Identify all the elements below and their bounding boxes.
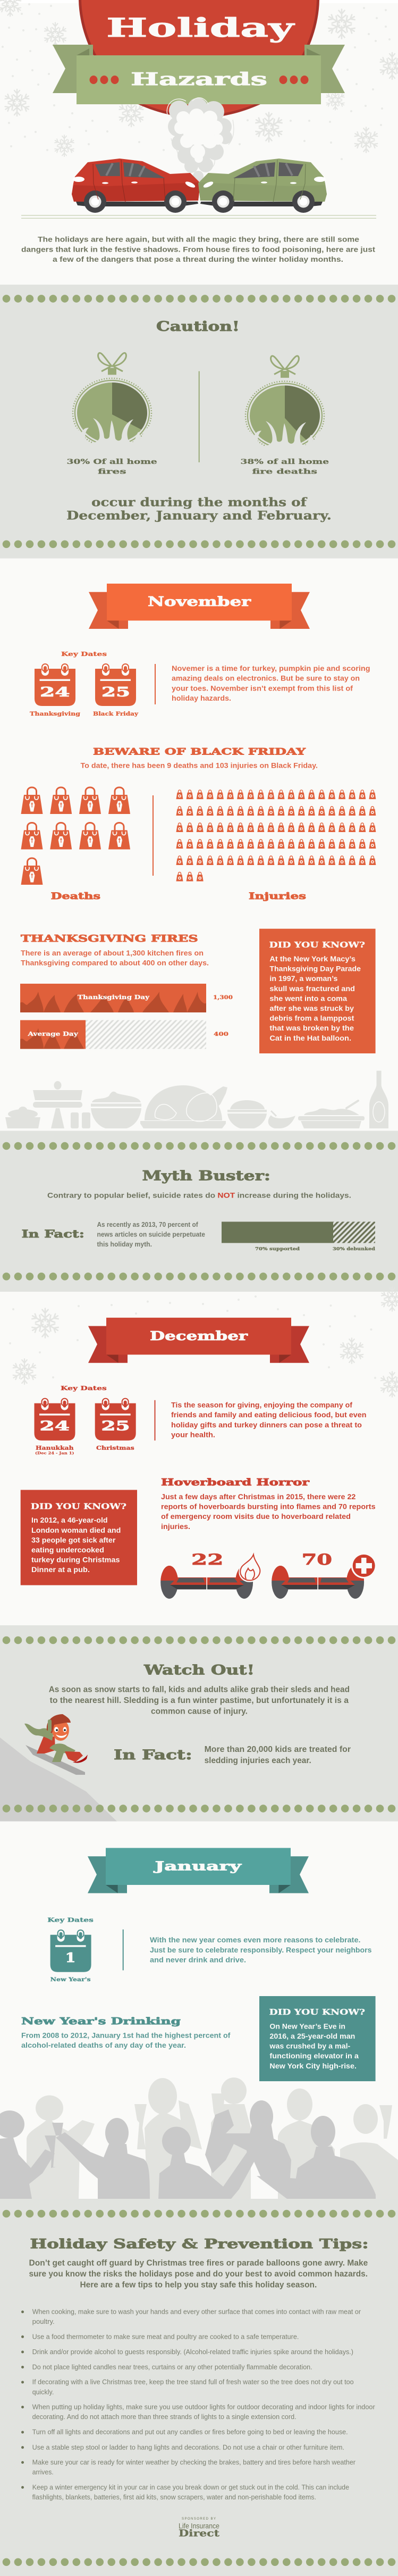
panel: watch out (0, 1625, 398, 1822)
intro text: January (150, 1935, 372, 1964)
sponsor logo: Life Insurance (179, 2522, 219, 2530)
ornament: 38 percent (242, 356, 327, 453)
callout: did you know January: DID YOU KNOW? (269, 2008, 365, 2017)
text: in fact: news articles on suicide perpetuate (97, 1231, 205, 1238)
text: hoverboards: Just a few days after Christmas in 2015, there were 22 (161, 1492, 356, 1501)
callout: did you know December: DID YOU KNOW? (31, 1502, 126, 1511)
callout: did you know November: she went into a coma (269, 994, 347, 1002)
callout: did you know December: 33 people got sick after (31, 1535, 116, 1544)
banner: December (88, 1318, 309, 1363)
intro text: January: With the new year comes even more reasons to celebrate. (150, 1935, 360, 1944)
text: in fact (205, 1745, 351, 1765)
text: safety intro (29, 2259, 368, 2290)
sponsor logo (179, 2517, 220, 2539)
caption: occur during the months of (91, 496, 308, 510)
callout: did you know December: London woman died and (31, 1526, 121, 1534)
intro text: The holidays are here again, but with all the magic they bring, there are still some (38, 235, 359, 244)
panel: January (0, 1848, 398, 2199)
callout: did you know November: Cat in the Hat balloon. (269, 1034, 351, 1042)
intro text: November: your toes. November isn’t exempt from this list of (172, 684, 353, 693)
heading: Myth Buster: Myth Buster: (142, 1168, 270, 1183)
road (21, 215, 376, 219)
intro text: November: holiday hazards. (172, 694, 231, 702)
heading: New Year's drinking: New Year's Drinking (21, 2016, 181, 2027)
text: in fact (97, 1221, 205, 1248)
illustration: party crowd (0, 2078, 398, 2199)
callout: did you know December: turkey during Christmas (31, 1556, 120, 1564)
key dates: 24 (40, 684, 70, 700)
label: 38 percent: fire deaths (252, 468, 317, 476)
label: In Fact: In Fact: (22, 1227, 84, 1240)
bar chart: kitchen fires: Average Day (27, 1031, 78, 1037)
callout: did you know January: 2016, a 25-year-old man (269, 2032, 355, 2040)
sponsor logo: Direct (179, 2528, 220, 2539)
text: myth: Contrary to popular belief, suicide rates do NOT increase during the holidays. (47, 1191, 351, 1199)
text: drinking: alcohol-related deaths of any day of the year. (21, 2041, 186, 2049)
chart: 103 injuries (176, 790, 376, 881)
text: drinking (21, 2031, 231, 2049)
list: safety tips: Drink and/or provide alcohol to guests responsibly. (Alcohol-related traffic injuries spike around the holidays.) (32, 2348, 353, 2356)
list: safety tips: If decorating with a live Christmas tree, keep the tree stand full of fresh water so the tree does not dry out too (32, 2379, 354, 2386)
label: In Fact: In Fact: (114, 1747, 192, 1763)
bar chart: myth coverage (222, 1221, 375, 1252)
bar chart: myth coverage: 30% debunked (333, 1247, 375, 1252)
callout: did you know January: On New Year’s Eve in (269, 2022, 345, 2030)
callout: did you know January: New York City high-rise. (269, 2062, 357, 2070)
panel: December (10, 1287, 398, 1599)
bar chart: myth coverage: 70% supported (255, 1247, 300, 1252)
label: 30 percent: 30% Of all home (67, 458, 157, 466)
list: safety tips: Use a stable step stool or ladder to hang lights and decorations. Do not use a chair or other furniture item. (32, 2444, 344, 2451)
text: drinking: From 2008 to 2012, January 1st had the highest percent of (21, 2031, 231, 2039)
chart: 70 hoverboard ER visits: 70 (302, 1551, 332, 1568)
green ribbon (53, 45, 345, 104)
label: Deaths: Deaths (51, 891, 100, 901)
text: Thanksgiving fires (21, 949, 209, 967)
list: safety tips: When putting up holiday lights, make sure you use outdoor lights for outdoor decorating and indoor lights for indoor (32, 2404, 375, 2411)
key dates (34, 1385, 136, 1455)
heading: Caution: Caution! (156, 319, 240, 334)
callout: did you know November: that was broken by the (269, 1024, 354, 1032)
bar chart: kitchen fires: 1,300 (213, 995, 233, 1001)
illustration: snowy hill (0, 1738, 117, 1822)
key dates: Black Friday (93, 711, 139, 717)
key dates: 24 (39, 1418, 70, 1434)
shield (79, 0, 319, 118)
caption: December, January and February. (66, 509, 332, 523)
intro text: November: Novemer is a time for turkey, pumpkin pie and scoring (172, 664, 370, 672)
bar chart: kitchen fires: Thanksgiving Day (78, 994, 150, 1001)
text: Thanksgiving fires: Thanksgiving compared to about 400 on other days. (21, 959, 209, 967)
icon: red car (72, 159, 200, 213)
intro text: December: Tis the season for giving, enjoying the company of (171, 1400, 352, 1409)
intro text: December (171, 1400, 367, 1439)
intro text: December: holiday gifts and turkey dinners can pose a threat to (171, 1420, 362, 1429)
heading: Watch Out: Watch Out! (143, 1663, 255, 1678)
list: safety tips: Turn off all lights and decorations and put out any candles or fires before going to bed or leaving the house. (32, 2429, 348, 2436)
intro text: January: Just be sure to celebrate responsibly. Respect your neighbors (150, 1946, 372, 1954)
key dates: Hanukkah (36, 1445, 74, 1451)
intro text: a few of the dangers that pose a threat during the winter holiday months. (53, 255, 343, 263)
text: safety intro: Don’t get caught off guard by Christmas tree fires or parade balloons gone awry. Make (29, 2259, 368, 2267)
text: sledding: to the nearest hill. Sledding is a fun winter pastime, but unfortunately it is a (50, 1696, 349, 1705)
banner: January (88, 1848, 309, 1893)
key dates: 25 (101, 1418, 130, 1434)
header panel (0, 0, 398, 263)
label: 30 percent: fires (98, 468, 126, 476)
chart: 9 deaths (21, 787, 130, 885)
text: in fact: More than 20,000 kids are treated for (205, 1745, 351, 1754)
callout: did you know November: Thanksgiving Day Parade (269, 964, 361, 973)
label: Injuries: Injuries (249, 891, 306, 901)
banner: November: November (148, 594, 251, 609)
chart: 22 hoverboard fires: 22 (191, 1551, 223, 1568)
callout: did you know November: debris from a lamppost (269, 1014, 354, 1023)
bar chart: kitchen fires: 400 (214, 1032, 228, 1037)
heading: safety tips: Holiday Safety & Prevention Tips: (30, 2236, 369, 2251)
key dates: Key Dates (47, 1917, 94, 1924)
text: hoverboards: of emergency room visits due to hoverboard related (161, 1512, 351, 1520)
callout: did you know January: was crushed by a mal- (269, 2042, 351, 2050)
text: in fact: As recently as 2013, 70 percent of (97, 1221, 198, 1228)
bar chart: kitchen fires (20, 984, 233, 1049)
intro text: dangers that lurk in the festive shadows. From house fires to food poisoning, here are just (21, 245, 375, 253)
key dates: (Dec 24 - Jan 1) (35, 1451, 74, 1455)
ornament: 30 percent (70, 353, 155, 450)
callout: did you know December: In 2012, a 46-year-old (31, 1516, 108, 1524)
illustration: thanksgiving food (5, 1071, 388, 1128)
key dates: Christmas (96, 1445, 134, 1451)
icon: green car (198, 159, 327, 213)
text: hoverboards: reports of hoverboards bursting into flames and 70 reports (161, 1502, 376, 1511)
intro text: December: friends and family and eating delicious food, but even (171, 1410, 367, 1419)
label: 38 percent (240, 458, 329, 476)
chart: 22 hoverboard fires (160, 1551, 262, 1599)
list: safety tips: Make sure your car is ready for winter weather by checking the brakes, battery and tires before harsh weather (32, 2459, 355, 2466)
icon: smoke (167, 98, 234, 181)
title: Holiday: Holiday (106, 12, 295, 43)
key dates: New Year's (50, 1976, 91, 1983)
heading: Thanksgiving fires: THANKSGIVING FIRES (21, 933, 198, 944)
divider (199, 371, 200, 462)
list: safety tips: decorating. And do not attach more than three strands of lights to a single extension cord. (32, 2413, 297, 2421)
callout: did you know November: skull was fractured and (269, 984, 355, 993)
text: sledding (49, 1685, 350, 1716)
intro text: January: and never drink and drive. (150, 1956, 246, 1964)
text: sledding: As soon as snow starts to fall, kids and adults alike grab their sleds and head (49, 1685, 350, 1694)
label: 38 percent: 38% of all home (240, 458, 329, 466)
heading: Black Friday: BEWARE OF BLACK FRIDAY (93, 747, 306, 758)
chart: 70 hoverboard ER visits (272, 1551, 377, 1599)
crowd front row (0, 2100, 376, 2199)
text: safety intro: Here are a few tips to help you stay safe this holiday season. (80, 2280, 317, 2290)
callout: did you know November (259, 929, 376, 1053)
callout: did you know November: DID YOU KNOW? (269, 941, 365, 950)
title: Hazards: Hazards (131, 69, 267, 89)
list: safety tips: arrives. (32, 2469, 54, 2476)
key dates: Key Dates (61, 1385, 107, 1392)
snow background (0, 0, 398, 159)
key dates: 1 (65, 1950, 75, 1965)
callout: did you know January: functioning elevator in a (269, 2051, 359, 2060)
caption (66, 496, 332, 523)
sponsor logo: SPONSORED BY (182, 2517, 216, 2521)
text: hoverboards: injuries. (161, 1522, 190, 1531)
list: safety tips: Do not place lighted candles near trees, curtains or any other potentially flammable decoration. (32, 2363, 312, 2371)
panel: November (5, 584, 388, 1128)
label: 30 percent (67, 458, 157, 476)
snow background (10, 1287, 398, 1397)
ribbon dots (89, 76, 308, 84)
callout: did you know December: Dinner at a pub. (31, 1565, 90, 1574)
text: Thanksgiving fires: There is an average of about 1,300 kitchen fires on (21, 949, 204, 957)
callout: did you know November: in 1997, a woman’s (269, 974, 338, 983)
heading: Hoverboard Horror: Hoverboard Horror (161, 1477, 310, 1488)
banner: November (89, 584, 310, 629)
callout: did you know December: eating undercooked (31, 1545, 104, 1554)
list: safety tips: When cooking, make sure to wash your hands and every other surface that comes into contact with raw meat or (32, 2308, 361, 2315)
list: safety tips: Use a food thermometer to make sure meat and poultry are cooked to a safe temperature. (32, 2333, 299, 2340)
banner: January: January (153, 1859, 242, 1874)
illustration: child on sled (24, 1714, 88, 1775)
text: sledding: common cause of injury. (151, 1707, 248, 1716)
key dates: 25 (101, 684, 130, 700)
panel: myth buster (0, 1131, 398, 1292)
callout: did you know November: At the New York Macy’s (269, 954, 355, 963)
crowd back row (27, 2078, 398, 2199)
callout: did you know January (259, 1996, 376, 2081)
panel: caution (0, 285, 398, 559)
text: in fact: this holiday myth. (97, 1241, 152, 1248)
panel: safety tips (0, 2199, 398, 2576)
list: safety tips: quickly. (32, 2388, 54, 2396)
intro text (21, 235, 375, 263)
key dates: Thanksgiving (30, 711, 81, 717)
text: safety intro: sure you know the risks the holidays pose and do your best to avoid common hazards. (29, 2270, 368, 2279)
key dates: Key Dates (61, 651, 107, 658)
intro text: November: amazing deals on electronics. But be sure to stay on (172, 674, 360, 682)
list: safety tips: poultry. (32, 2318, 55, 2325)
callout: did you know December (21, 1490, 137, 1585)
banner: December: December (150, 1329, 248, 1343)
text: hoverboards (161, 1492, 376, 1531)
list: safety tips (21, 2308, 375, 2501)
intro text: December: your health. (171, 1430, 215, 1439)
list: safety tips: Keep a winter emergency kit in your car in case you break down or get stuck out in the cold. This can include (32, 2483, 349, 2491)
key dates (47, 1917, 94, 1983)
subheading: Black Friday: To date, there has been 9 deaths and 103 injuries on Black Friday. (81, 761, 318, 769)
intro text: November (172, 664, 370, 702)
text: in fact: sledding injuries each year. (205, 1756, 311, 1765)
key dates (30, 651, 139, 717)
callout: did you know November: after she was struck by (269, 1004, 354, 1012)
list: safety tips: flashlights, blankets, batteries, first aid kits, snow scrapers, water and non-perishable food items. (32, 2494, 316, 2501)
